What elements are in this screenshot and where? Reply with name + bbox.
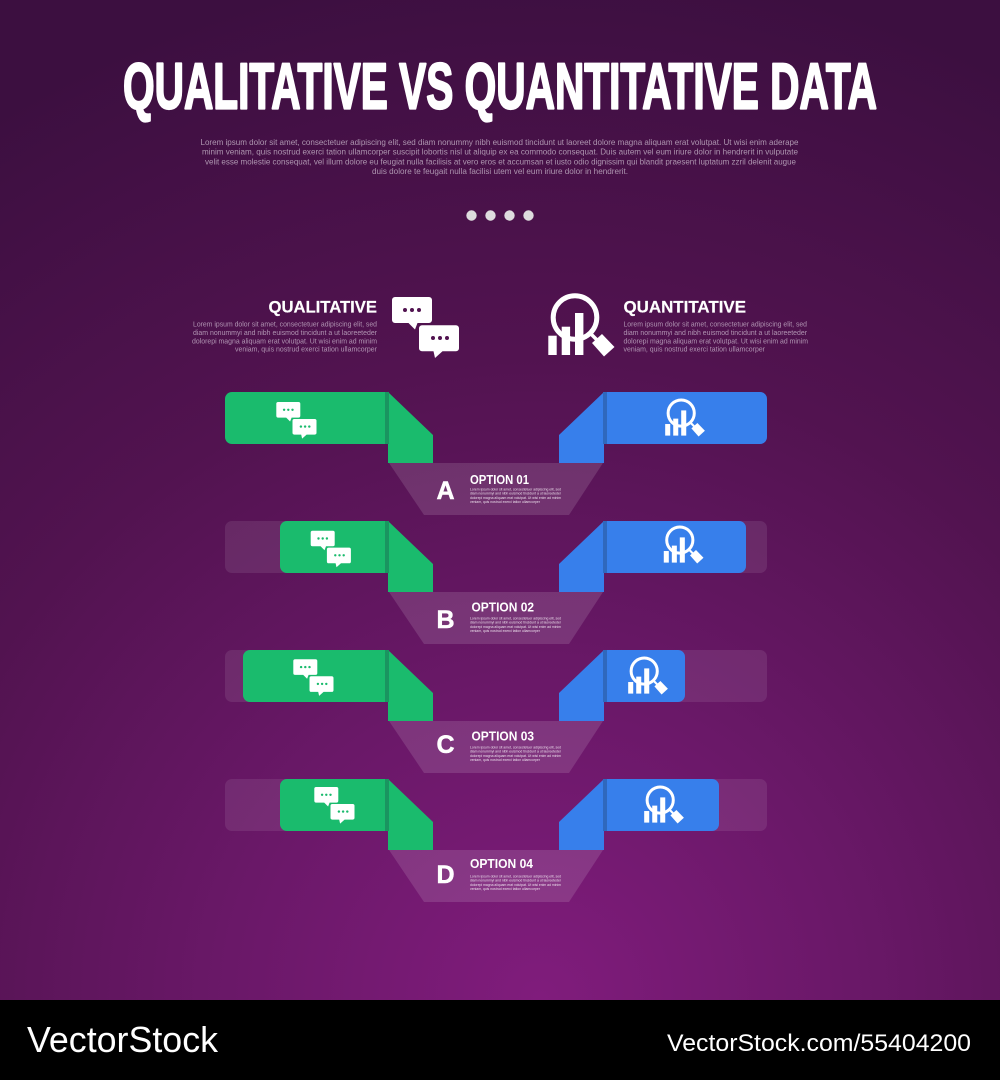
option panel C: C [436,731,455,759]
option panel D: dolorepi magna aliquam erat volutpat. Ut wisi enim ad minim [470,883,561,887]
icon: magnifier over bar chart [548,296,614,356]
option panel C: veniam, quis nostrud exerci tation ullamcorper [470,758,541,762]
qualitative heading: QUALITATIVE [268,298,377,316]
blue ribbon A [559,392,767,463]
icon: magnifier D [644,787,684,824]
option panel B: dolorepi magna aliquam erat volutpat. Ut wisi enim ad minim [470,625,561,629]
pagination dots [466,210,534,221]
option panel C: dolorepi magna aliquam erat volutpat. Ut wisi enim ad minim [470,754,561,758]
intro paragraph [200,137,799,176]
background track C [225,650,767,702]
green ribbon D [280,779,433,850]
icon: speech bubbles D [314,787,354,824]
option panel D: OPTION 04 [470,857,533,871]
intro paragraph: velit esse molestie consequat, vel illum dolore eu feugiat nulla facilisis at vero eros et accumsan et iusto odio dignissim qui blandit praesent luptatum zzril delenit augue [205,156,796,166]
row A [225,392,767,515]
option panel D: veniam, quis nostrud exerci tation ullamcorper [470,887,541,891]
option panel A: diam nonummyi and nibh euismod tincidunt a ut laoreeteder [470,492,562,496]
option panel B: B [436,606,455,634]
qualitative description: dolorepi magna aliquam erat volutpat. Ut wisi enim ad minim [192,336,377,345]
option panel B: veniam, quis nostrud exerci tation ullamcorper [470,629,541,633]
qualitative description: Lorem ipsum dolor sit amet, consectetuer adipiscing elit, sed [193,320,377,329]
blue ribbon C [559,650,685,721]
qualitative description [192,320,377,354]
option panel B [389,592,603,644]
qualitative header [192,297,459,358]
option panel A: Lorem ipsum dolor sit amet, consectetuer adipiscing elit, sed [470,488,561,492]
option panel C: OPTION 03 [472,730,534,744]
quantitative description: diam nonummyi and nibh euismod tincidunt a ut laoreeteder [624,328,807,337]
option panel D: D [436,861,455,889]
row B [225,521,767,644]
intro paragraph: Lorem ipsum dolor sit amet, consectetuer adipiscing elit, sed diam nonummy nibh euismod tincidunt ut laoreet dolore magna aliquam erat volutpat. Ut wisi enim aderape [200,137,799,147]
footer url: VectorStock.com/55404200 [667,1030,971,1057]
option panel C: Lorem ipsum dolor sit amet, consectetuer adipiscing elit, sed [470,746,561,750]
option panel B: diam nonummyi and nibh euismod tincidunt a ut laoreeteder [470,621,562,625]
quantitative header [548,296,808,356]
option panel C: diam nonummyi and nibh euismod tincidunt a ut laoreeteder [470,750,562,754]
option panel D: diam nonummyi and nibh euismod tincidunt a ut laoreeteder [470,879,562,883]
blue ribbon B [559,521,746,592]
background track D [225,779,767,831]
option panel D: Lorem ipsum dolor sit amet, consectetuer adipiscing elit, sed [470,874,561,878]
option panel A: OPTION 01 [470,473,529,487]
option panel A: dolorepi magna aliquam erat volutpat. Ut wisi enim ad minim [470,496,561,500]
quantitative description: dolorepi magna aliquam erat volutpat. Ut wisi enim ad minim [624,336,808,345]
qualitative description: diam nonummyi and nibh euismod tincidunt a ut laoreeteder [193,328,377,337]
intro paragraph: duis dolore te feugait nulla facilisi utem vel eum iriure dolor in hendrerit. [372,166,628,176]
qualitative description: veniam, quis nostrud exerci tation ullamcorper [235,345,377,354]
quantitative description [624,320,808,354]
row D [225,779,767,902]
row C [225,650,767,773]
background track B [225,521,767,573]
icon: magnifier C [628,658,668,694]
footer brand: VectorStock [27,1019,219,1060]
icon: speech bubbles C [293,659,334,696]
option panel B: Lorem ipsum dolor sit amet, consectetuer adipiscing elit, sed [470,616,561,620]
option panel A [389,463,603,515]
option panel C [389,721,603,773]
option panel B: OPTION 02 [472,600,534,614]
icon: magnifier B [664,527,704,564]
icon: speech bubbles [392,297,459,358]
icon: magnifier A [665,400,705,436]
option panel A: veniam, quis nostrud exerci tation ullamcorper [470,500,541,504]
intro paragraph: minim veniam, quis nostrud exerci tation ullamcorper suscipit lobortis nisl ut aliquip ex ea commodo consequat. Duis autem vel eum iriure dolor in hendrerit in vulputate [202,147,798,157]
icon: speech bubbles A [276,402,316,439]
green ribbon A [225,392,433,463]
quantitative heading: QUANTITATIVE [624,298,746,316]
green ribbon C [243,650,433,721]
quantitative description: veniam, quis nostrud exerci tation ullamcorper [624,345,765,354]
green ribbon B [280,521,433,592]
footer bar [0,1000,1000,1080]
blue ribbon D [559,779,719,850]
icon: speech bubbles B [311,531,351,567]
option panel A: A [436,477,455,505]
quantitative description: Lorem ipsum dolor sit amet, consectetuer adipiscing elit, sed [624,320,807,329]
option panel D [389,850,603,902]
